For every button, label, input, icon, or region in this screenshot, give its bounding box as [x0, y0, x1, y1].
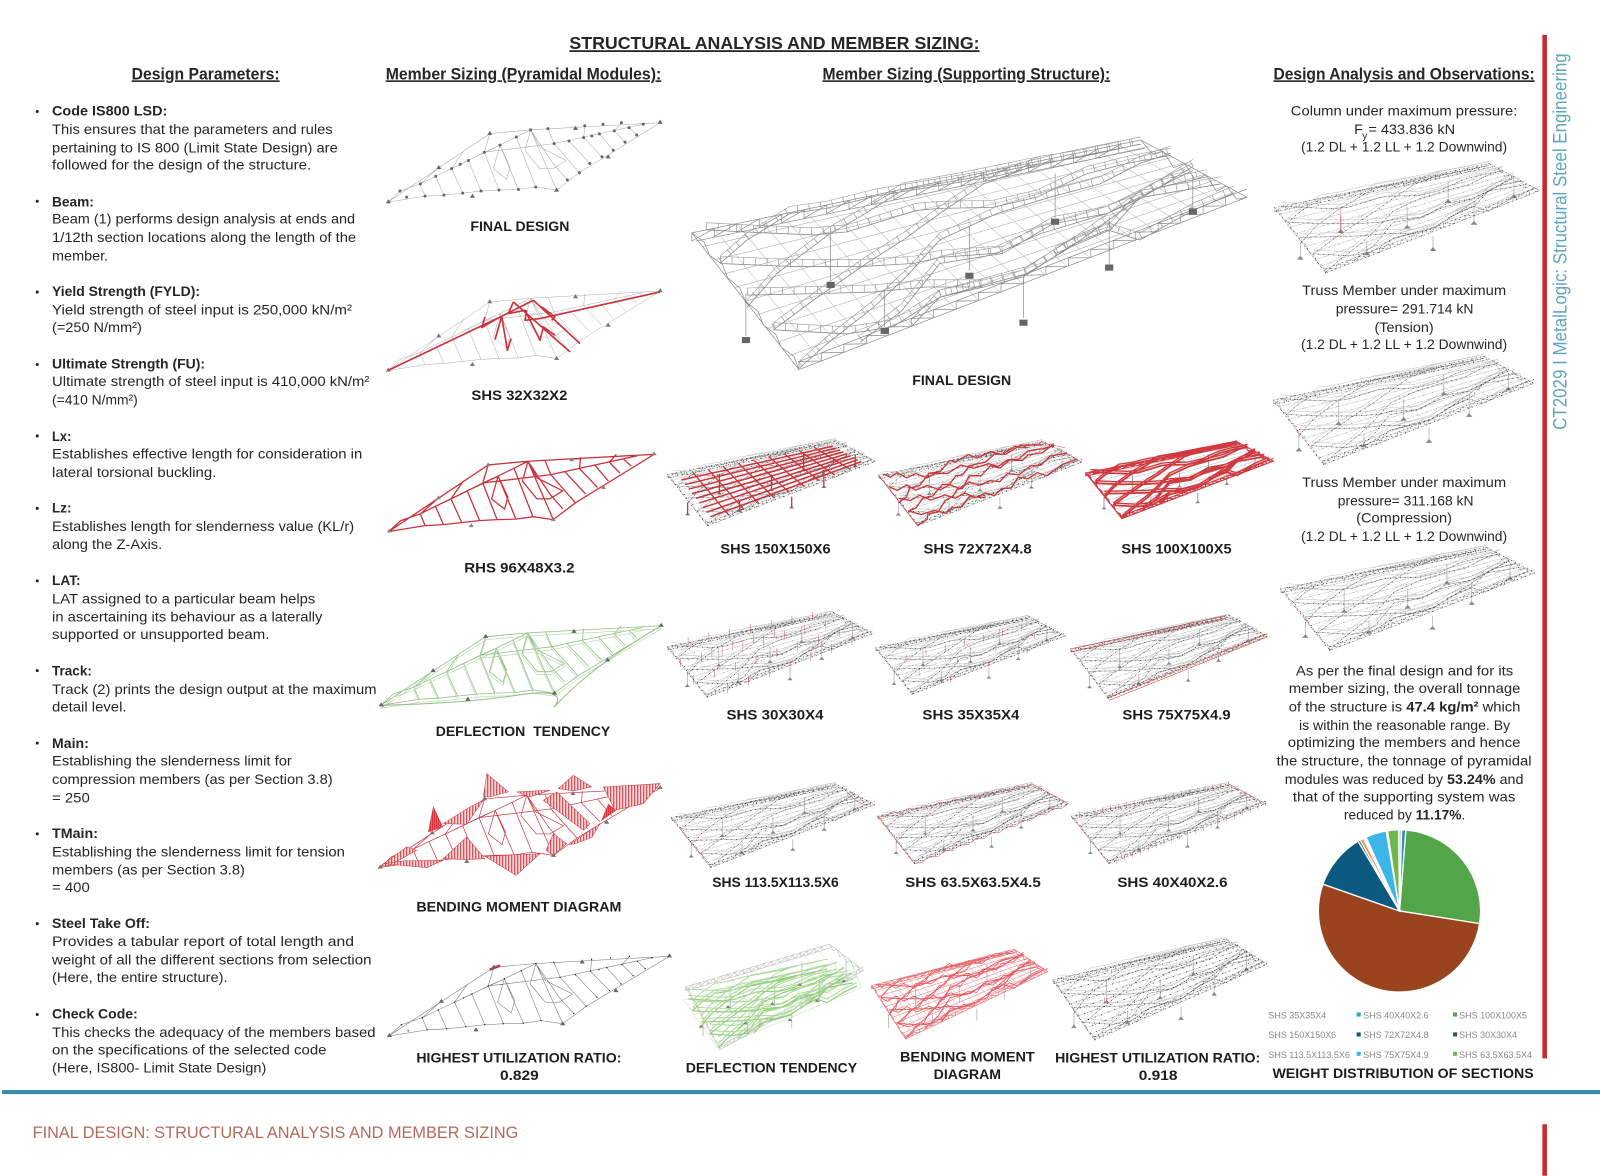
diagram: pyramid highest utilization ratio	[387, 953, 672, 1037]
text: truss member compression: (1.2 DL + 1.2 LL + 1.2 Downwind)	[1301, 529, 1507, 545]
diagram: supporting structure highest utilization ratio	[1053, 937, 1267, 1040]
heading: design analysis: Design Analysis and Observations:	[1273, 65, 1535, 83]
text: truss member tension: pressure= 291.714 kN	[1336, 302, 1473, 318]
diagram: SHS 40X40X2.6	[1071, 781, 1266, 864]
text: column under maximum pressure: = 433.836 kN	[1368, 122, 1455, 138]
parameter list: LAT:	[52, 573, 81, 589]
label: SHS 150X150X6: SHS 150X150X6	[720, 541, 831, 557]
red vertical bar top	[1542, 35, 1547, 1058]
text: tonnage summary: member sizing, the overall tonnage	[1289, 681, 1520, 697]
diagram: supporting structure deflection tendency	[684, 944, 863, 1050]
parameter list: pertaining to IS 800 (Limit State Design) are	[52, 140, 338, 156]
label: SHS 35X35X4: SHS 35X35X4	[922, 708, 1019, 724]
parameter list: weight of all the different sections from selection	[51, 953, 371, 969]
diagram: SHS 150X150X6	[667, 439, 876, 526]
label: highest utilization ratio 0.918: 0.918	[1139, 1068, 1178, 1084]
diagram: SHS 72X72X4.8	[879, 440, 1082, 526]
diagram: supporting structure bending moment diagram	[871, 949, 1048, 1039]
parameter list: Code IS800 LSD:	[52, 104, 167, 120]
pie chart: weight distribution	[1318, 830, 1481, 992]
label: final design: FINAL DESIGN	[470, 219, 569, 235]
diagram: pyramid SHS 32X32X2	[386, 288, 663, 372]
parameter list: followed for the design of the structure.	[52, 158, 311, 174]
label: bending moment diagram: BENDING MOMENT DIAGRAM	[416, 899, 621, 915]
label: SHS 63.5X63.5X4.5: SHS 63.5X63.5X4.5	[905, 875, 1041, 891]
text: tonnage summary	[1277, 664, 1532, 824]
parameter list: Lx:	[52, 429, 71, 445]
parameter list: Ultimate strength of steel input is 410,000 kN/m²	[52, 374, 370, 390]
label: bending moment diagram: DIAGRAM	[934, 1067, 1001, 1083]
label: SHS 40X40X2.6: SHS 40X40X2.6	[1117, 875, 1228, 891]
pie chart legend: SHS 72X72X4.8	[1363, 1030, 1429, 1040]
diagram: column under maximum pressure	[1274, 162, 1540, 273]
diagram: supporting structure final design	[692, 137, 1247, 370]
heading: pyramidal modules: Member Sizing (Pyramidal Modules):	[386, 65, 661, 83]
parameter list: Establishing the slenderness limit for tension	[52, 844, 345, 860]
label: deflection tendency: DEFLECTION TENDENCY	[686, 1061, 858, 1077]
label: highest utilization ratio 0.829: HIGHEST UTILIZATION RATIO:	[416, 1050, 621, 1066]
label: highest utilization ratio 0.829: 0.829	[500, 1068, 539, 1084]
parameter list: Beam:	[52, 194, 94, 210]
diagram: pyramid bending moment diagram	[378, 774, 663, 875]
label: bending moment diagram	[900, 1049, 1035, 1083]
parameter list: Establishes length for slenderness value (KL/r)	[52, 519, 354, 535]
text: tonnage summary: modules was reduced by 53.24% and	[1285, 772, 1524, 788]
label: SHS 30X30X4: SHS 30X30X4	[727, 708, 824, 724]
text: truss member tension	[1301, 283, 1507, 353]
pie chart legend: SHS 63.5X63.5X4	[1459, 1050, 1532, 1060]
text: tonnage summary: As per the final design and for its	[1296, 664, 1513, 680]
footer rule	[2, 1090, 1600, 1094]
parameter list: (Here, IS800- Limit State Design)	[52, 1061, 266, 1077]
diagram: SHS 30X30X4	[667, 611, 873, 697]
text: column under maximum pressure	[1291, 104, 1517, 155]
text: truss member compression: Truss Member under maximum	[1302, 475, 1506, 491]
label: highest utilization ratio 0.829	[416, 1050, 621, 1084]
panel: member sizing pyramidal modules	[378, 65, 672, 1084]
heading: design parameters: Design Parameters:	[132, 65, 280, 83]
red vertical bar bottom	[1542, 1124, 1547, 1176]
parameter list: member.	[52, 248, 108, 264]
pie chart legend: SHS 40X40X2.6	[1363, 1011, 1429, 1021]
parameter list: along the Z-Axis.	[52, 537, 162, 553]
parameter list: Steel Take Off:	[52, 916, 150, 932]
label: RHS 96X48X3.2: RHS 96X48X3.2	[464, 561, 575, 577]
pie chart legend: SHS 35X35X4	[1268, 1011, 1326, 1021]
label: SHS 32X32X2: SHS 32X32X2	[471, 388, 567, 404]
parameter list: (=410 N/mm²)	[52, 392, 138, 408]
parameter list: on the specifications of the selected code	[52, 1042, 327, 1058]
text: column under maximum pressure: F	[1354, 122, 1363, 138]
parameter list: = 400	[52, 880, 90, 896]
parameter list: 1/12th section locations along the length of the	[52, 230, 356, 246]
parameter list: (=250 N/mm²)	[52, 320, 142, 336]
diagram: SHS 113.5X113.5X6	[671, 782, 875, 867]
diagram: pyramid final design	[386, 120, 663, 203]
heading: supporting structure: Member Sizing (Supporting Structure):	[822, 65, 1110, 83]
text: column under maximum pressure: (1.2 DL + 1.2 LL + 1.2 Downwind)	[1301, 139, 1507, 155]
label: bending moment diagram: BENDING MOMENT	[900, 1049, 1035, 1065]
diagram: pyramid RHS 96X48X3.2	[387, 451, 657, 533]
parameter list: Ultimate Strength (FU):	[52, 357, 205, 373]
pie chart legend	[1268, 1011, 1532, 1060]
parameter list: Check Code:	[52, 1007, 138, 1023]
pie chart legend: SHS 113.5X113.5X6	[1268, 1050, 1350, 1060]
label: final design: FINAL DESIGN	[912, 373, 1011, 389]
diagram: SHS 100X100X5	[1086, 441, 1273, 519]
parameter list: This ensures that the parameters and rules	[52, 122, 333, 138]
vertical project label: CT2029 I MetalLogic: Structural Steel Engineering	[1549, 53, 1571, 430]
parameter list: supported or unsupported beam.	[52, 627, 269, 643]
text: column under maximum pressure: y	[1362, 131, 1368, 142]
panel: design parameters	[36, 65, 377, 1077]
diagram: SHS 63.5X63.5X4.5	[878, 783, 1069, 864]
parameter list: Beam (1) performs design analysis at ends and	[52, 212, 355, 228]
label: weight distribution of sections: WEIGHT DISTRIBUTION OF SECTIONS	[1272, 1066, 1534, 1082]
pie chart legend: SHS 30X30X4	[1459, 1030, 1517, 1040]
text: tonnage summary: is within the reasonable range. By	[1299, 718, 1511, 734]
label: SHS 100X100X5: SHS 100X100X5	[1121, 541, 1232, 557]
parameter list	[36, 104, 377, 1077]
diagram: SHS 75X75X4.9	[1070, 614, 1267, 700]
footer title: FINAL DESIGN: STRUCTURAL ANALYSIS AND MEMBER SIZING	[33, 1123, 518, 1142]
title: STRUCTURAL ANALYSIS AND MEMBER SIZING:	[569, 33, 980, 53]
diagram: truss member in tension	[1273, 354, 1534, 465]
parameter list: Main:	[52, 736, 89, 752]
parameter list: Track (2) prints the design output at the maximum	[52, 682, 377, 698]
text: tonnage summary: optimizing the members and hence	[1288, 735, 1520, 751]
panel: design analysis and observations	[1268, 65, 1540, 1082]
text: truss member compression	[1301, 475, 1507, 545]
parameter list: Establishes effective length for consideration in	[52, 446, 362, 462]
parameter list: in ascertaining its behaviour as a laterally	[52, 610, 323, 626]
text: tonnage summary: the structure, the tonnage of pyramidal	[1277, 754, 1532, 770]
label: highest utilization ratio 0.918	[1055, 1050, 1260, 1084]
label: highest utilization ratio 0.918: HIGHEST UTILIZATION RATIO:	[1055, 1050, 1260, 1066]
label: deflection tendency: DEFLECTION TENDENCY	[436, 724, 611, 740]
diagram: SHS 35X35X4	[876, 615, 1065, 694]
parameter list: TMain:	[52, 826, 98, 842]
parameter list: This checks the adequacy of the members based	[52, 1025, 376, 1041]
diagram: pyramid deflection tendency	[379, 623, 664, 708]
parameter list: LAT assigned to a particular beam helps	[52, 591, 315, 607]
text: truss member tension: (Tension)	[1374, 320, 1434, 336]
parameter list: Provides a tabular report of total length and	[52, 934, 354, 950]
label: SHS 75X75X4.9: SHS 75X75X4.9	[1122, 708, 1231, 724]
parameter list: compression members (as per Section 3.8)	[52, 772, 333, 788]
parameter list: Yield strength of steel input is 250,000 kN/m²	[52, 303, 352, 319]
parameter list: Establishing the slenderness limit for	[52, 754, 292, 770]
text: tonnage summary: that of the supporting system was	[1293, 789, 1515, 805]
parameter list: lateral torsional buckling.	[52, 465, 216, 481]
label: SHS 113.5X113.5X6: SHS 113.5X113.5X6	[712, 875, 839, 891]
text: truss member compression: pressure= 311.168 kN	[1338, 493, 1473, 509]
parameter list: Yield Strength (FYLD):	[52, 284, 200, 300]
text: column under maximum pressure: Column under maximum pressure:	[1291, 104, 1517, 120]
text: truss member tension: (1.2 DL + 1.2 LL + 1.2 Downwind)	[1301, 337, 1507, 353]
diagram: truss member in compression	[1281, 545, 1535, 650]
text: truss member compression: (Compression)	[1356, 511, 1452, 527]
text: tonnage summary: reduced by 11.17%.	[1344, 808, 1465, 824]
parameter list: Track:	[52, 664, 92, 680]
parameter list: members (as per Section 3.8)	[52, 863, 245, 879]
pie chart legend: SHS 75X75X4.9	[1363, 1050, 1429, 1060]
parameter list: Lz:	[52, 500, 71, 516]
text: tonnage summary: of the structure is 47.4 kg/m² which	[1289, 699, 1520, 715]
parameter list: (Here, the entire structure).	[52, 970, 228, 986]
label: SHS 72X72X4.8: SHS 72X72X4.8	[923, 541, 1032, 557]
text: truss member tension: Truss Member under maximum	[1302, 283, 1506, 299]
panel: member sizing supporting structure	[667, 65, 1273, 1084]
pie chart legend: SHS 100X100X5	[1459, 1011, 1527, 1021]
parameter list: detail level.	[52, 699, 127, 715]
parameter list: = 250	[52, 790, 90, 806]
pie chart legend: SHS 150X150X6	[1268, 1030, 1336, 1040]
